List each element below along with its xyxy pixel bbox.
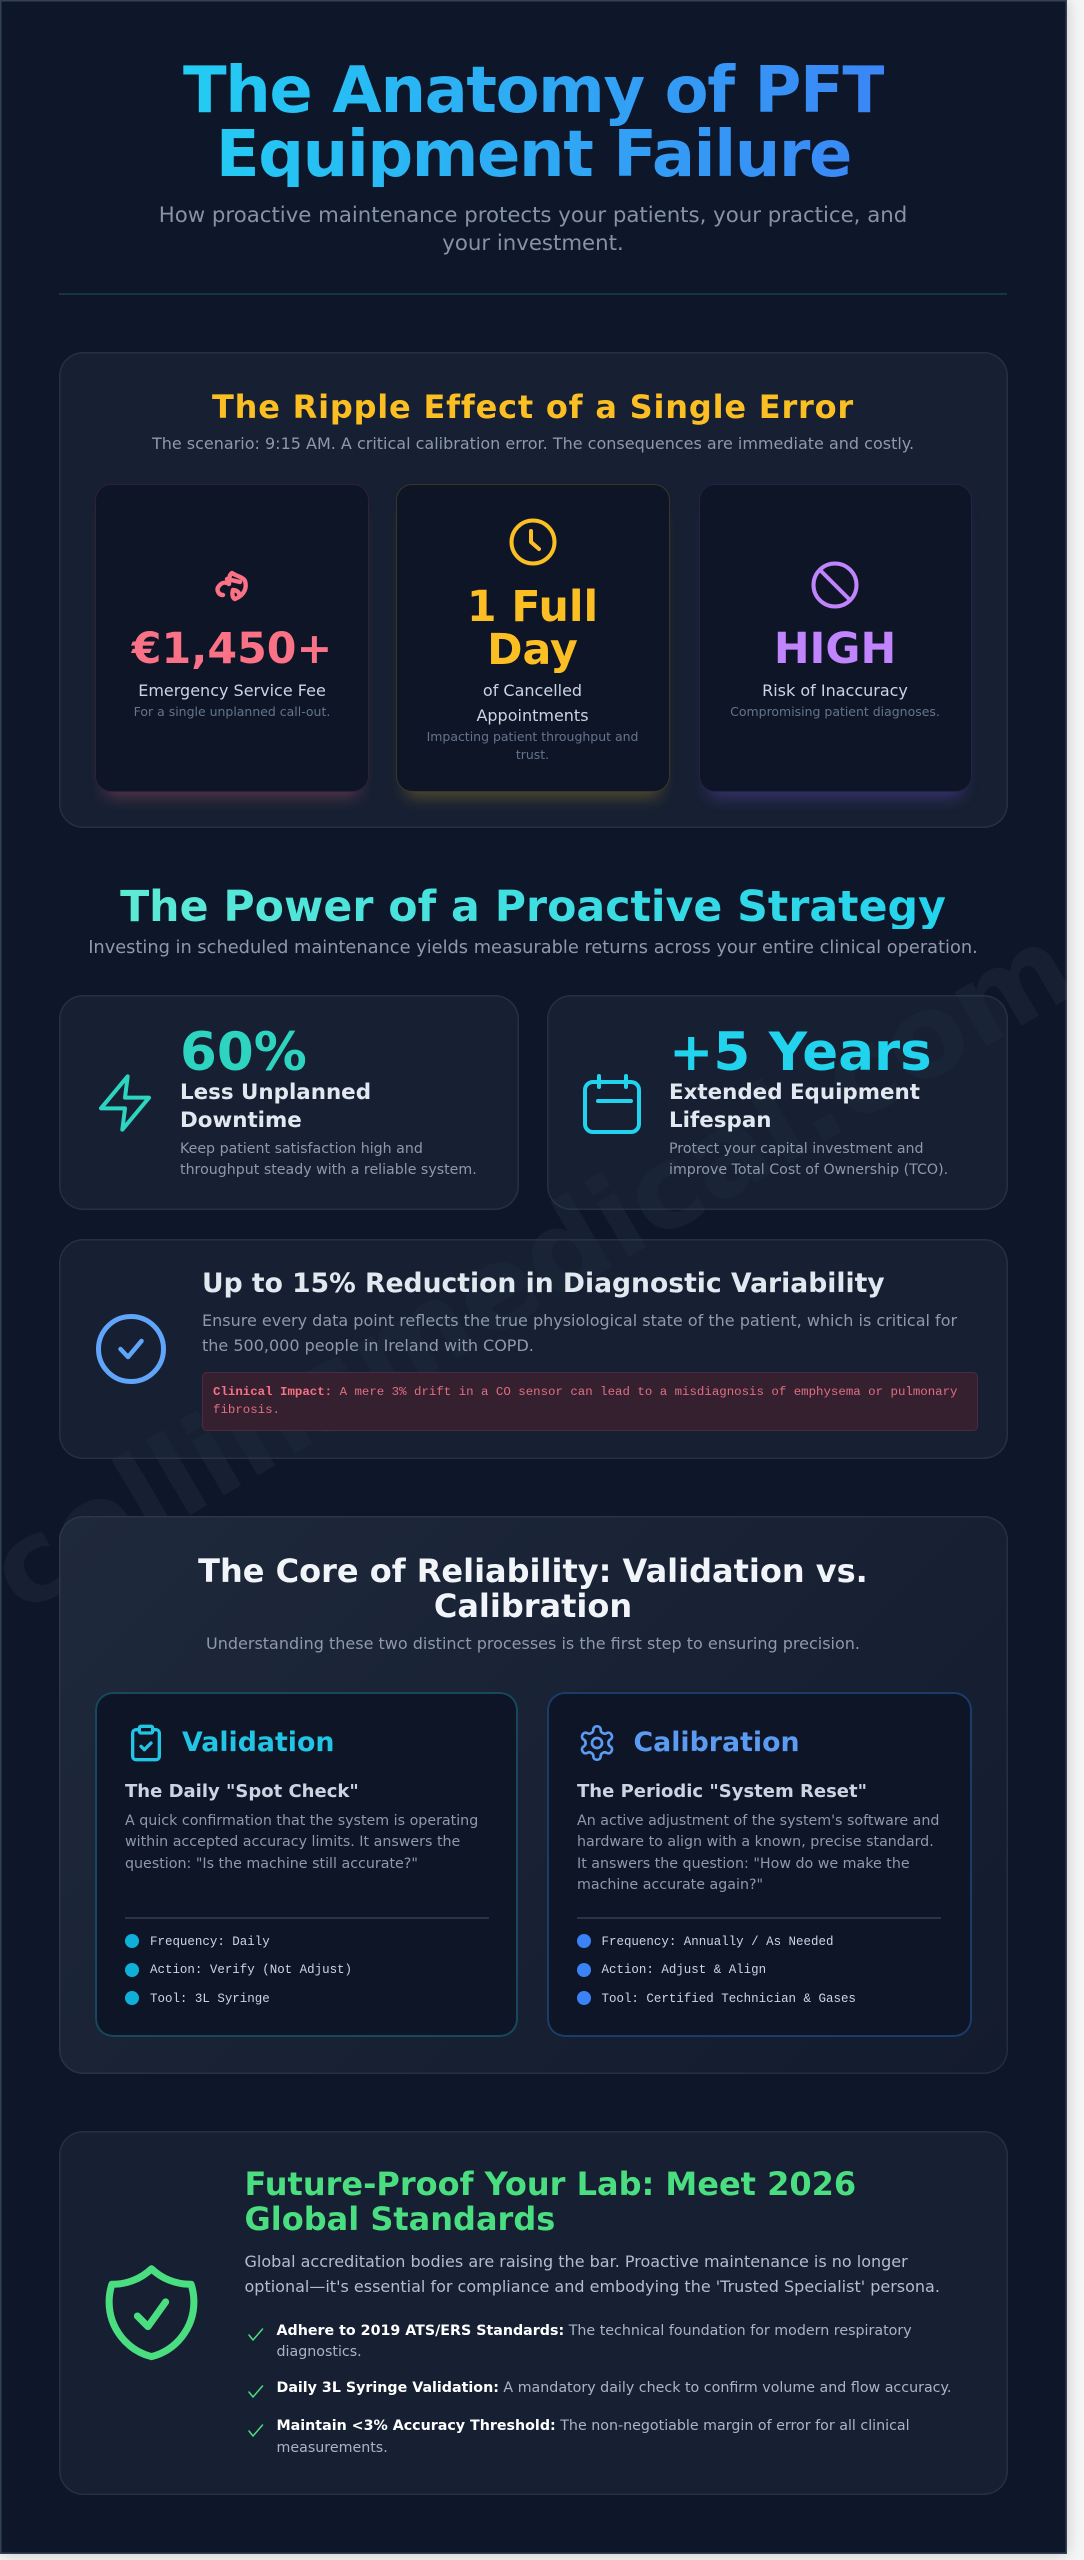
item: tool syringe <box>125 1991 270 2006</box>
note: fee: For a single unplanned call-out. <box>134 704 330 719</box>
panel: future-proof: Daily 3L Syringe Validation: A mandatory daily check to confirm volume and flow accuracy. <box>276 2380 951 2396</box>
stat heading: lifespan <box>669 1080 920 1132</box>
panel: future-proof: measurements. <box>276 2440 388 2456</box>
text: calibration: An active adjustment of the system's software and <box>577 1812 939 1828</box>
value: one full day: 1 Full <box>467 582 598 632</box>
text: calibration: hardware to align with a known, precise standard. <box>577 1834 934 1850</box>
label: appointments: Appointments <box>476 706 589 725</box>
heading: core of reliability: The Core of Reliability: Validation vs. <box>198 1552 868 1590</box>
stat heading: downtime <box>180 1080 371 1132</box>
title: The Anatomy of PFT <box>183 54 885 128</box>
stat text: lifespan <box>669 1140 948 1178</box>
heading: future-proof <box>244 2165 856 2238</box>
stat card: lifespan <box>546 995 1008 1210</box>
card: validation: Frequency: Daily <box>150 1935 270 1949</box>
text: future-proof <box>244 2252 940 2296</box>
item: action adjust <box>577 1963 766 1977</box>
text: calibration: machine accurate again?" <box>577 1877 763 1893</box>
card: calibration: Frequency: Annually / As Needed <box>602 1935 833 1949</box>
stat text: downtime: throughput steady with a reliable system. <box>180 1162 477 1178</box>
heading: future-proof: Global Standards <box>244 2200 555 2238</box>
text: future-proof: optional—it's essential for compliance and embodying the 'Trusted Specialist' persona. <box>244 2277 940 2296</box>
header divider <box>59 293 1007 295</box>
value: high: HIGH <box>774 624 896 674</box>
panel: diagnostic variability <box>58 1239 1008 1459</box>
value: one full day <box>467 582 598 675</box>
text: validation: A quick confirmation that the system is operating <box>125 1812 478 1828</box>
text: calibration: It answers the question: "How do we make the <box>577 1856 910 1872</box>
stat text: downtime <box>180 1140 477 1178</box>
heading: core of reliability: Calibration <box>434 1587 632 1625</box>
label: fee: Emergency Service Fee <box>138 681 326 700</box>
subheading: calibration: The Periodic "System Reset" <box>577 1781 867 1802</box>
text: validation: within accepted accuracy limits. It answers the <box>125 1834 460 1850</box>
panel: future-proof: Adhere to 2019 ATS/ERS Standards: The technical foundation for modern respiratory <box>276 2322 912 2338</box>
value: fee: €1,450+ <box>132 624 332 674</box>
subtitle: your investment. <box>442 231 624 256</box>
heading: ripple effect: The Ripple Effect of a Single Error <box>212 388 854 426</box>
heading: variability: Up to 15% Reduction in Diagnostic Variability <box>202 1268 885 1299</box>
note: appointments: Impacting patient throughput and <box>427 729 638 744</box>
stat card: downtime <box>58 995 518 1210</box>
panel: future-proof: diagnostics. <box>276 2344 362 2360</box>
text: variability: Ensure every data point reflects the true physiological state of the patient, which is critical for <box>202 1310 957 1330</box>
panel: future-proof <box>58 2131 1008 2495</box>
subheading: validation: The Daily "Spot Check" <box>125 1781 359 1802</box>
text: validation <box>125 1812 478 1872</box>
stat heading: lifespan: Lifespan <box>669 1108 771 1132</box>
heading: future-proof: Future-Proof Your Lab: Meet 2026 <box>244 2165 856 2203</box>
text: calibration <box>577 1812 939 1893</box>
card: calibration: Tool: Certified Technician & Gases <box>602 1992 856 2006</box>
stat heading: downtime: Less Unplanned <box>180 1080 371 1104</box>
title: Equipment Failure <box>216 118 851 192</box>
item: tool technician <box>577 1991 856 2006</box>
card: validation: Tool: 3L Syringe <box>150 1992 270 2006</box>
label: appointments: of Cancelled <box>483 681 582 700</box>
stat: plus five years: +5 Years <box>669 1022 932 1083</box>
icon: ban <box>812 562 858 608</box>
checklist item: accuracy threshold <box>248 2418 910 2456</box>
panel: future-proof: Maintain <3% Accuracy Threshold: The non-negotiable margin of error for all clinical <box>276 2418 910 2434</box>
callout: clinical impact: Clinical Impact: A mere 3% drift in a CO sensor can lead to a misdiagnosis of emphysema or pulmonary <box>213 1385 958 1399</box>
icon: check circle <box>96 1314 166 1384</box>
text: variability: the 500,000 people in Ireland with COPD. <box>202 1336 534 1354</box>
card: calibration <box>546 1692 972 2037</box>
stat text: lifespan: Protect your capital investment and <box>669 1140 924 1156</box>
icon: shield check <box>106 2265 198 2360</box>
heading: calibration: Calibration <box>634 1727 800 1758</box>
note: appointments: trust. <box>516 747 549 762</box>
proactive strategy subtitle: Investing in scheduled maintenance yields measurable returns across your entire clinical operation. <box>88 937 978 958</box>
stat: 60 percent: 60% <box>180 1022 307 1083</box>
stat text: downtime: Keep patient satisfaction high and <box>180 1140 423 1156</box>
checklist item: syringe validation <box>248 2380 951 2398</box>
item: frequency daily <box>125 1934 270 1949</box>
subtitle <box>159 202 907 256</box>
callout: clinical impact <box>202 1372 978 1431</box>
panel: ripple effect <box>58 352 1008 828</box>
heading: core of reliability <box>198 1552 868 1625</box>
item: action verify <box>125 1963 352 1977</box>
note: inaccuracy: Compromising patient diagnoses. <box>730 704 940 719</box>
note: appointments <box>427 729 638 762</box>
text: variability <box>202 1310 958 1354</box>
label: appointments <box>476 681 589 725</box>
card: validation <box>95 1692 518 2037</box>
scenario text: The scenario: 9:15 AM. A critical calibration error. The consequences are immediate and costly. <box>152 434 914 452</box>
checklist item: ATS/ERS <box>248 2322 912 2360</box>
heading: proactive strategy: The Power of a Proactive Strategy <box>120 882 946 932</box>
icon: clock <box>510 518 556 566</box>
card: validation: Action: Verify (Not Adjust) <box>150 1963 352 1977</box>
subtitle: core of reliability: Understanding these two distinct processes is the first step to ensuring precision. <box>206 1634 860 1653</box>
stat text: lifespan: improve Total Cost of Ownership (TCO). <box>669 1162 948 1178</box>
stat heading: lifespan: Extended Equipment <box>669 1080 920 1104</box>
card: emergency fee <box>95 484 369 792</box>
icon: clipboard check <box>131 1724 161 1762</box>
icon: bolt <box>98 1074 152 1132</box>
icon: calendar <box>583 1074 641 1134</box>
panel: validation vs calibration <box>58 1516 1008 2074</box>
icon: wrench glyph <box>215 570 248 602</box>
heading: validation: Validation <box>182 1727 334 1758</box>
stat heading: downtime: Downtime <box>180 1108 302 1132</box>
text: validation: question: "Is the machine still accurate?" <box>125 1856 418 1872</box>
callout: clinical impact: fibrosis. <box>213 1403 280 1417</box>
subtitle: How proactive maintenance protects your patients, your practice, and <box>159 202 907 228</box>
card: calibration: Action: Adjust & Align <box>602 1963 766 1977</box>
icon: gear <box>580 1725 614 1761</box>
text: future-proof: Global accreditation bodies are raising the bar. Proactive maintenance is no longer <box>244 2252 908 2271</box>
card: inaccuracy <box>698 484 972 792</box>
title <box>183 59 884 187</box>
value: one full day: Day <box>487 625 578 675</box>
card: cancelled appointments <box>396 484 670 792</box>
item: frequency annually <box>577 1934 833 1949</box>
label: inaccuracy: Risk of Inaccuracy <box>762 681 908 700</box>
